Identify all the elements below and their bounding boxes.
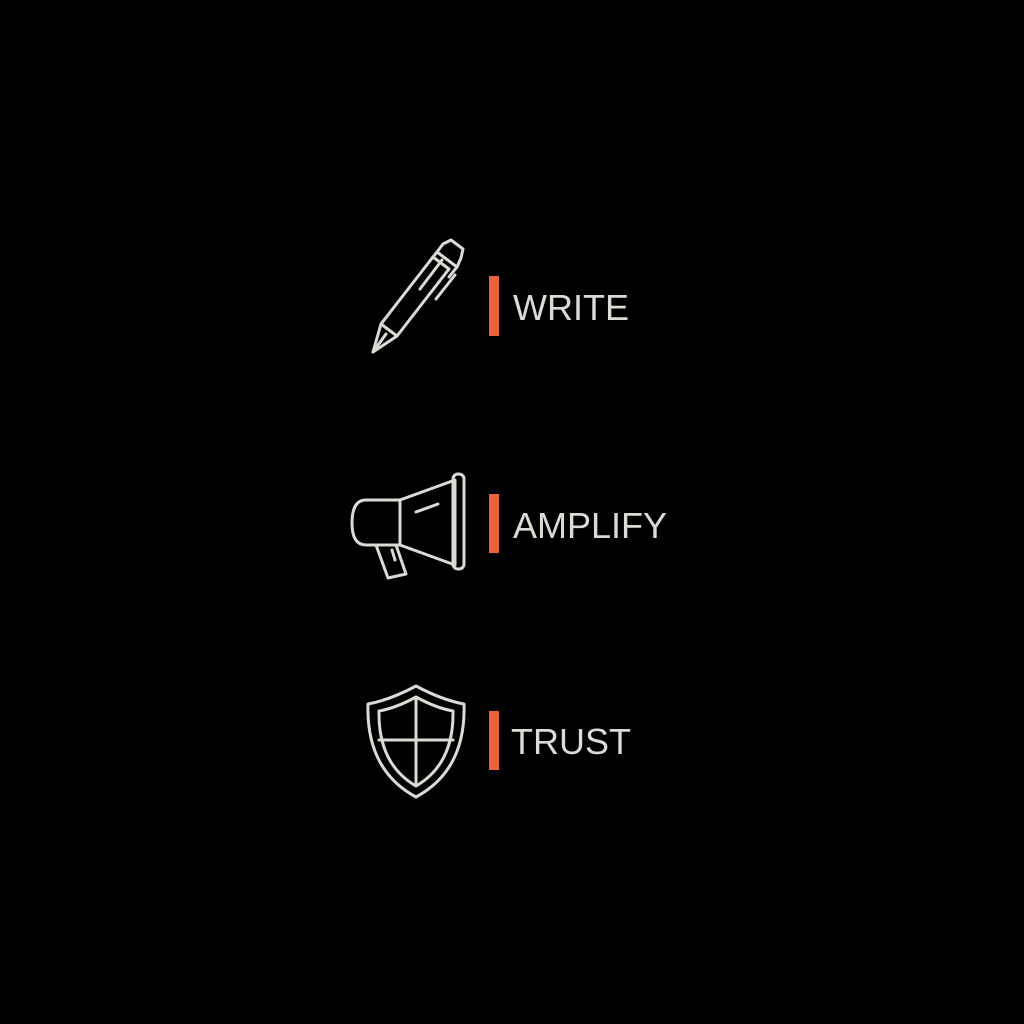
icon: megaphone	[352, 474, 464, 578]
item: amplify	[489, 494, 667, 553]
accent bar: write	[489, 276, 499, 336]
label: amplify: AMPLIFY	[513, 505, 667, 546]
icon: shield	[368, 686, 464, 797]
item: trust	[489, 711, 631, 770]
accent bar: amplify	[489, 494, 499, 553]
label: trust: TRUST	[511, 721, 631, 762]
accent bar: trust	[489, 711, 499, 770]
icon: pencil	[373, 240, 463, 352]
item: write	[489, 276, 629, 336]
label: write: WRITE	[513, 287, 629, 328]
